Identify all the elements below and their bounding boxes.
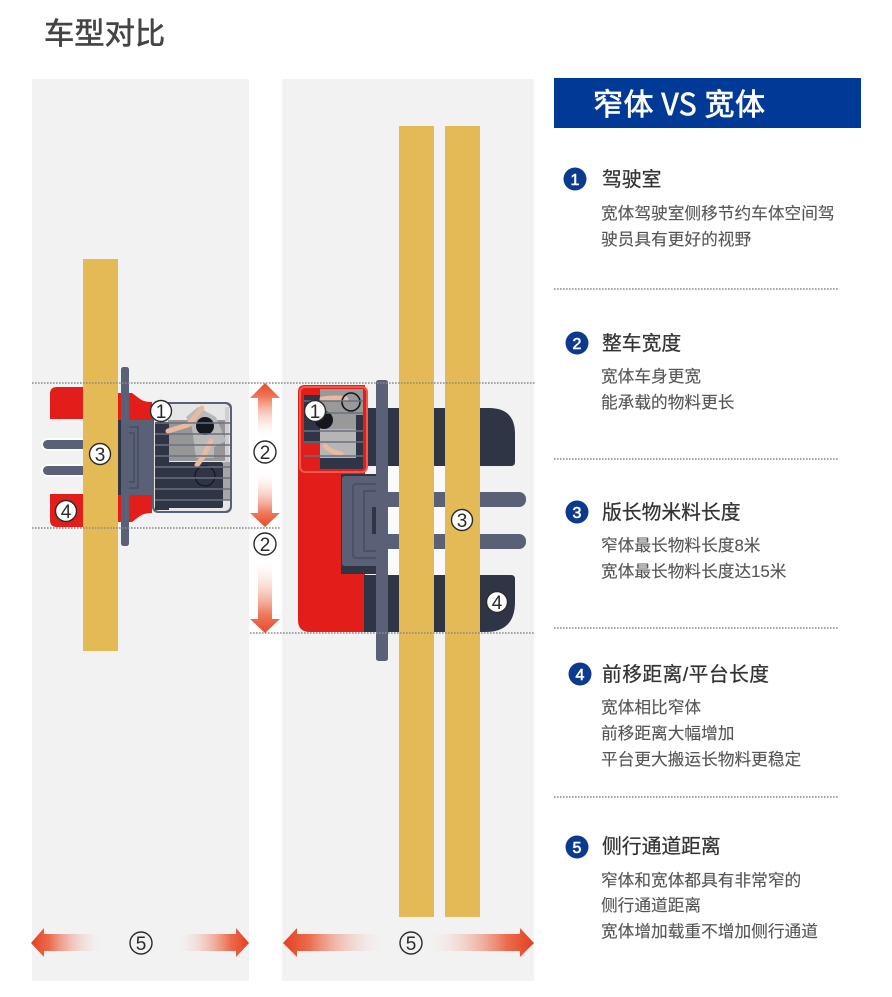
badge 3 [566,500,588,524]
badge 2 [566,332,588,354]
panel: wide body [282,79,534,981]
item 1: cab: 驶员具有更好的视野 [601,230,751,249]
item 3: material length: 版长物米料长度 [602,502,741,524]
header: narrow vs wide [554,78,861,128]
item 5: side aisle [566,836,818,941]
item 1: cab: 宽体驾驶室侧移节约车体空间驾 [601,204,835,223]
label 3, narrow: 3 [95,445,105,466]
label 2, lower [254,533,276,556]
label 1, narrow: 1 [156,402,166,423]
label 2, upper: 2 [260,443,270,464]
badge 4 [568,662,592,686]
item 5: side aisle: 宽体增加载重不增加侧行通道 [601,922,818,941]
label 1, wide [304,400,326,423]
truck: narrow body [41,367,232,546]
truck: wide body [298,380,526,661]
item 4: reach and platform: 平台更大搬运长物料更稳定 [601,750,802,769]
material: 15 m, bar 2 [445,126,480,917]
badge 2: 2 [573,336,582,353]
item 2: vehicle width: 能承载的物料更长 [601,393,735,412]
badge 3: 3 [573,505,582,522]
item 2: vehicle width: 宽体车身更宽 [601,367,701,386]
badge 4: 4 [576,667,585,684]
label 4, wide [486,592,508,614]
item 4: reach and platform [568,662,802,769]
label 5, narrow [130,932,152,955]
cab [152,402,232,513]
label 4, narrow: 4 [61,502,72,523]
label 4, wide: 4 [492,593,503,614]
badge 5 [566,836,588,858]
label 4, narrow [56,500,76,523]
item 1: cab: 驾驶室 [602,169,661,191]
cab [300,387,367,472]
title: 车型对比 [44,17,165,51]
header: narrow vs wide: 窄体 VS 宽体 [593,80,765,124]
item 3: material length [566,500,787,581]
badge 5: 5 [573,840,582,857]
label 3, narrow [90,444,110,466]
mast [121,367,129,546]
item 2: vehicle width: 整车宽度 [602,333,681,355]
badge 1 [564,168,586,190]
arrow: side aisle, narrow body [31,928,249,957]
item 4: reach and platform: 宽体相比窄体 [601,698,701,717]
label 3, wide: 3 [457,511,467,532]
label 5, wide: 5 [406,934,416,955]
panel: narrow body [31,79,249,981]
material: 15 m, bar 1 [399,126,434,917]
label 5, narrow: 5 [136,934,146,955]
material: 8 m [83,259,118,651]
item 5: side aisle: 侧行通道距离 [602,836,721,858]
arrows: vehicle width [250,383,280,633]
item 4: reach and platform: 前移距离大幅增加 [601,724,734,743]
label 2, upper [254,441,276,464]
label 3, wide [452,510,472,532]
item 5: side aisle: 窄体和宽体都具有非常窄的 [601,871,801,890]
badge 1: 1 [571,172,580,189]
label 5, wide [400,932,422,955]
item 1: cab [564,168,835,249]
label 1, wide: 1 [310,402,320,423]
item 3: material length: 窄体最长物料长度8米 [601,536,761,555]
label 2, lower: 2 [260,535,270,556]
label 1, narrow [150,400,172,423]
item 5: side aisle: 侧行通道距离 [601,896,701,915]
arrow: side aisle, wide body [283,928,534,957]
item 3: material length: 宽体最长物料长度达15米 [601,562,787,581]
item 2: vehicle width [566,332,735,412]
item 4: reach and platform: 前移距离/平台长度 [602,664,769,686]
mast [376,380,388,661]
